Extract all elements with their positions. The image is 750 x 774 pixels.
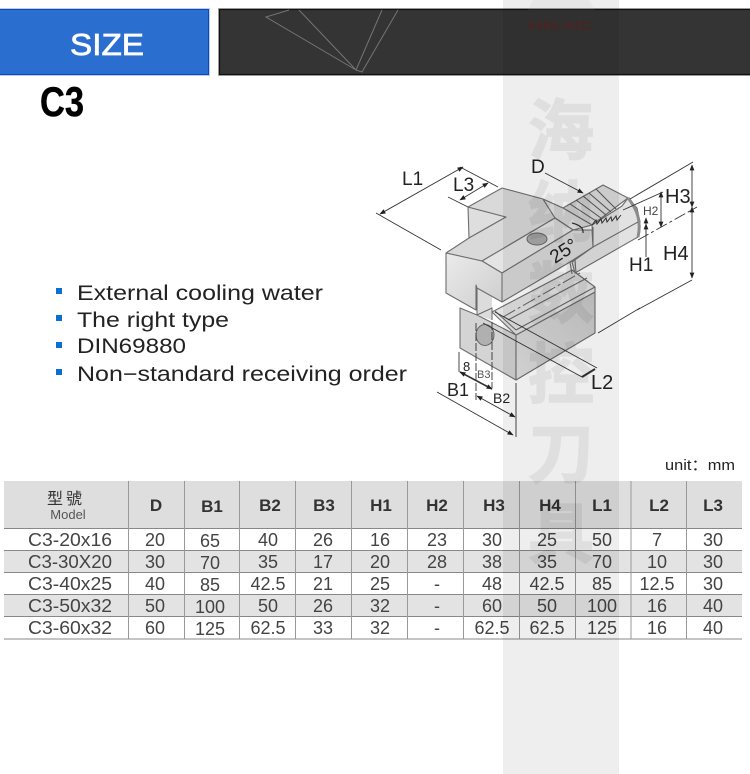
row: C3-20x16: 23 (427, 530, 447, 550)
dimension labels: B3 (477, 369, 490, 381)
table header: B3 (313, 496, 335, 515)
row: C3-60x32: 62.5 (529, 618, 565, 638)
dimension labels: L3 (453, 175, 474, 196)
side hole (476, 324, 494, 346)
row: C3-20x16: 30 (703, 530, 723, 550)
row: C3-30X20: 30 (703, 552, 723, 572)
table backgrounds (4, 481, 742, 617)
row: C3-60x32: 62.5 (474, 618, 510, 638)
dimension labels: 8 (463, 359, 470, 374)
table header: H3 (483, 496, 505, 515)
dimension labels: D (531, 157, 545, 178)
watermark band with vertical characters: 海 (528, 78, 594, 174)
unit note: unit：mm (665, 457, 735, 474)
row: C3-40x25: 30 (703, 574, 723, 594)
row: C3-20x16: 65 (200, 531, 220, 551)
row: C3-30X20: 70 (200, 553, 220, 573)
row: C3-30X20: 20 (370, 552, 390, 572)
row: C3-60x32: 32 (370, 618, 390, 638)
row: C3-50x32: 16 (647, 596, 667, 616)
list item: The right type: The right type (77, 309, 229, 332)
panel: dark header bar (218, 8, 750, 76)
dimension labels: H1 (629, 255, 653, 276)
table header: B2 (259, 496, 281, 515)
watermark band with vertical characters: 数 (528, 241, 594, 337)
row: C3-30X20: 30 (145, 552, 165, 572)
row: C3-50x32: 100 (587, 596, 617, 616)
row: C3-30X20: C3-30X20 (28, 552, 112, 572)
row: C3-50x32: 32 (370, 596, 390, 616)
row: C3-50x32: 26 (313, 596, 333, 616)
serrations (570, 189, 621, 225)
table rows (28, 530, 723, 639)
row: C3-20x16: 16 (370, 530, 390, 550)
row: C3-20x16: 30 (482, 530, 502, 550)
row: C3-30X20: 70 (592, 552, 612, 572)
row: C3-60x32: 62.5 (250, 618, 286, 638)
dimension labels: 25° (546, 235, 582, 268)
row: C3-30X20: 28 (427, 552, 447, 572)
row: C3-20x16: 25 (537, 530, 557, 550)
row: C3-30X20: 35 (537, 552, 557, 572)
dimension labels: B1 (447, 380, 469, 400)
table header: H4 (539, 496, 561, 515)
row: C3-60x32: - (434, 618, 440, 638)
row: C3-20x16: C3-20x16 (28, 530, 112, 550)
row: C3-60x32: 125 (195, 619, 225, 639)
table header: D (150, 496, 162, 515)
logo: globe with HN-NC: HN-NC (528, 17, 594, 33)
row: C3-20x16: 40 (258, 530, 278, 550)
dimension labels: L2 (591, 372, 613, 394)
dimension labels (402, 157, 691, 406)
table header: L1 (592, 496, 612, 515)
row: C3-60x32: 40 (703, 618, 723, 638)
row: C3-50x32: 40 (703, 596, 723, 616)
row: C3-60x32: 125 (587, 618, 617, 638)
lower block (460, 270, 595, 380)
watermark band with vertical characters: 纳 (528, 160, 594, 256)
hole (527, 233, 547, 245)
row: C3-20x16 (28, 530, 723, 551)
row: C3-40x25: C3-40x25 (28, 574, 112, 594)
row: C3-20x16: 50 (592, 530, 612, 550)
watermark band with vertical characters (503, 0, 619, 774)
row: C3-50x32: 50 (258, 596, 278, 616)
row: C3-50x32: 100 (195, 597, 225, 617)
row: C3-40x25: 25 (370, 574, 390, 594)
dimension labels: H2 (643, 204, 659, 218)
row: C3-60x32: C3-60x32 (28, 618, 112, 638)
table header: L3 (703, 496, 723, 515)
dimension lines (376, 162, 697, 437)
row: C3-40x25: 85 (592, 574, 612, 594)
row: C3-50x32 (28, 596, 723, 617)
heading: SIZE: SIZE (70, 27, 144, 62)
watermark band with vertical characters: 具 (528, 481, 594, 577)
table header (47, 490, 723, 522)
row: C3-20x16: 7 (652, 530, 662, 550)
technical drawing: C3 tool holder (376, 157, 697, 437)
row: C3-60x32 (28, 618, 723, 639)
table header: B1 (201, 497, 223, 516)
row: C3-30X20: 35 (258, 552, 278, 572)
row: C3-40x25: 42.5 (250, 574, 286, 594)
row: C3-20x16: 26 (313, 530, 333, 550)
row: C3-60x32: 16 (647, 618, 667, 638)
dimension labels: L1 (402, 169, 423, 190)
row: C3-40x25: 21 (313, 574, 333, 594)
row: C3-40x25: 42.5 (529, 574, 565, 594)
table header: Model (50, 507, 86, 522)
spec table (4, 481, 742, 639)
table header: H2 (426, 496, 448, 515)
watermark band with vertical characters: 刀 (528, 401, 594, 497)
row: C3-50x32: 50 (145, 596, 165, 616)
row: C3-30X20: 38 (482, 552, 502, 572)
row: C3-60x32: 33 (313, 618, 333, 638)
list item: Non-standard receiving order: Non−standard receiving order (77, 363, 407, 386)
row: C3-40x25: 12.5 (639, 574, 675, 594)
logo: globe with HN-NC (528, 9, 594, 30)
feature list (56, 282, 407, 386)
list item: DIN69880: DIN69880 (77, 335, 186, 358)
panel: blue SIZE banner (0, 8, 210, 76)
row: C3-40x25: 85 (200, 575, 220, 595)
dimension labels: H3 (665, 186, 691, 208)
row: C3-30X20: 17 (313, 552, 333, 572)
heading: C3: C3 (40, 78, 84, 125)
table header: 型號 (47, 490, 85, 508)
row: C3-50x32: 50 (537, 596, 557, 616)
row: C3-50x32: - (434, 596, 440, 616)
row: C3-30X20: 10 (647, 552, 667, 572)
row: C3-50x32: C3-50x32 (28, 596, 112, 616)
watermark band with vertical characters: 控 (528, 322, 594, 418)
row: C3-30X20 (28, 552, 723, 573)
row: C3-20x16: 20 (145, 530, 165, 550)
upper block faces (446, 188, 593, 310)
table header: H1 (370, 496, 392, 515)
cylinder shank (563, 185, 640, 274)
row: C3-60x32: 60 (145, 618, 165, 638)
row: C3-40x25: - (434, 574, 440, 594)
row: C3-40x25: 48 (482, 574, 502, 594)
row: C3-40x25 (28, 574, 723, 595)
row: C3-40x25: 40 (145, 574, 165, 594)
list item: External cooling water: External cooling water (77, 282, 323, 305)
dimension labels: B2 (493, 390, 510, 406)
row: C3-50x32: 60 (482, 596, 502, 616)
table header: L2 (649, 496, 669, 515)
dimension labels: H4 (663, 243, 689, 265)
